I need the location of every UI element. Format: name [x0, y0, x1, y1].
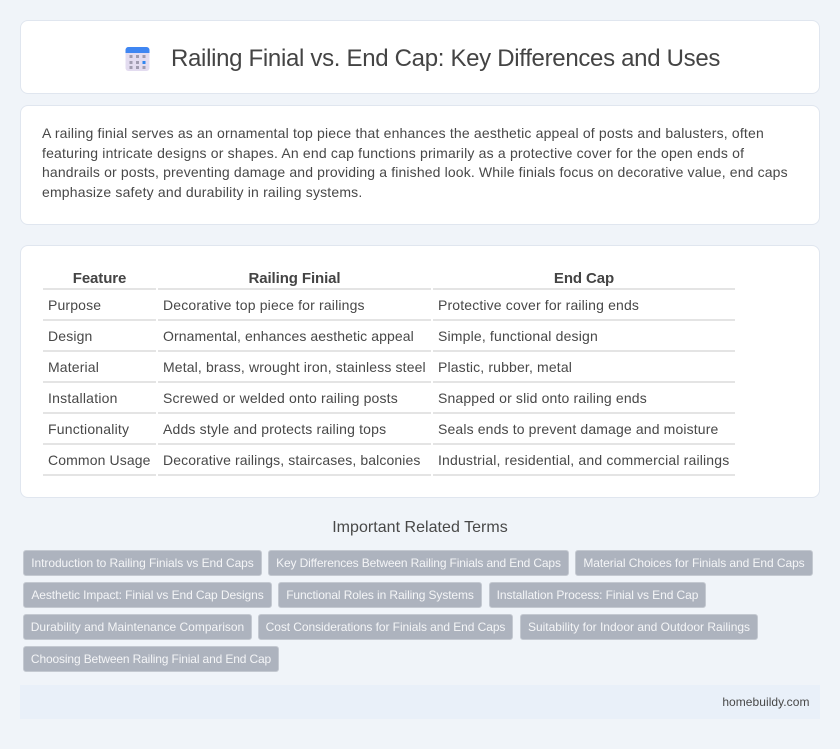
row: Material: Plastic, rubber, metal — [438, 359, 572, 375]
row: Installation: Installation — [48, 390, 118, 406]
row: Design — [48, 328, 598, 344]
row: Installation — [48, 390, 647, 406]
row: Common Usage — [48, 452, 729, 468]
row: Functionality — [48, 421, 718, 437]
related term tags: Key Differences Between Railing Finials and End Caps — [276, 556, 561, 570]
row: Purpose — [48, 297, 639, 313]
footer bar — [20, 685, 820, 719]
table header row: Feature — [73, 270, 126, 287]
row: Purpose: Protective cover for railing ends — [438, 297, 639, 313]
related term tags: Functional Roles in Railing Systems — [286, 588, 474, 602]
intro paragraph: A railing finial serves as an ornamental top piece that enhances the aesthetic appeal of posts and balusters, often — [42, 125, 764, 141]
row: Material: Material — [48, 359, 99, 375]
row: Purpose: Decorative top piece for railings — [163, 297, 365, 313]
intro paragraph: emphasize safety and durability in railing systems. — [42, 184, 362, 200]
intro paragraph: handrails or posts, preventing damage and providing a finished look. While finials focus on decorative value, end caps — [42, 164, 788, 180]
related term tags: Cost Considerations for Finials and End Caps — [266, 620, 505, 634]
related term tags: Durability and Maintenance Comparison — [31, 620, 244, 634]
row: Installation: Screwed or welded onto railing posts — [163, 390, 398, 406]
related term tags: Installation Process: Finial vs End Cap — [497, 588, 698, 602]
related term tags: Aesthetic Impact: Finial vs End Cap Designs — [31, 588, 264, 602]
row: Common Usage: Industrial, residential, and commercial railings — [438, 452, 729, 468]
row: Common Usage: Decorative railings, staircases, balconies — [163, 452, 421, 468]
table header row: End Cap — [554, 270, 614, 287]
related term tags — [23, 550, 813, 672]
table rules — [43, 288, 735, 476]
header panel — [20, 20, 820, 94]
table header row: Railing Finial — [249, 270, 340, 287]
intro text panel — [20, 105, 820, 225]
footer source text: homebuildy.com — [722, 695, 810, 709]
row: Functionality: Functionality — [48, 421, 129, 437]
comparison table panel — [20, 245, 820, 498]
title: Railing Finial vs. End Cap: Key Differences and Uses — [171, 45, 720, 72]
related term tags: Choosing Between Railing Finial and End Cap — [31, 652, 271, 666]
row: Material — [48, 359, 572, 375]
related term tags: Material Choices for Finials and End Caps — [583, 556, 805, 570]
intro paragraph: featuring intricate designs or shapes. An end cap functions primarily as a protective cover for the open ends of — [42, 145, 744, 161]
table header row — [73, 270, 614, 287]
related term tags: Suitability for Indoor and Outdoor Railings — [528, 620, 750, 634]
intro paragraph — [42, 125, 788, 200]
related terms heading: Important Related Terms — [332, 519, 508, 536]
row: Purpose: Purpose — [48, 297, 101, 313]
icon: calendar — [126, 47, 150, 71]
row: Design: Design — [48, 328, 92, 344]
related term tags: Introduction to Railing Finials vs End Caps — [31, 556, 254, 570]
row: Functionality: Seals ends to prevent damage and moisture — [438, 421, 718, 437]
row: Functionality: Adds style and protects railing tops — [163, 421, 386, 437]
row: Design: Simple, functional design — [438, 328, 598, 344]
row: Common Usage: Common Usage — [48, 452, 151, 468]
row: Installation: Snapped or slid onto railing ends — [438, 390, 647, 406]
row: Design: Ornamental, enhances aesthetic appeal — [163, 328, 414, 344]
row: Material: Metal, brass, wrought iron, stainless steel — [163, 359, 426, 375]
